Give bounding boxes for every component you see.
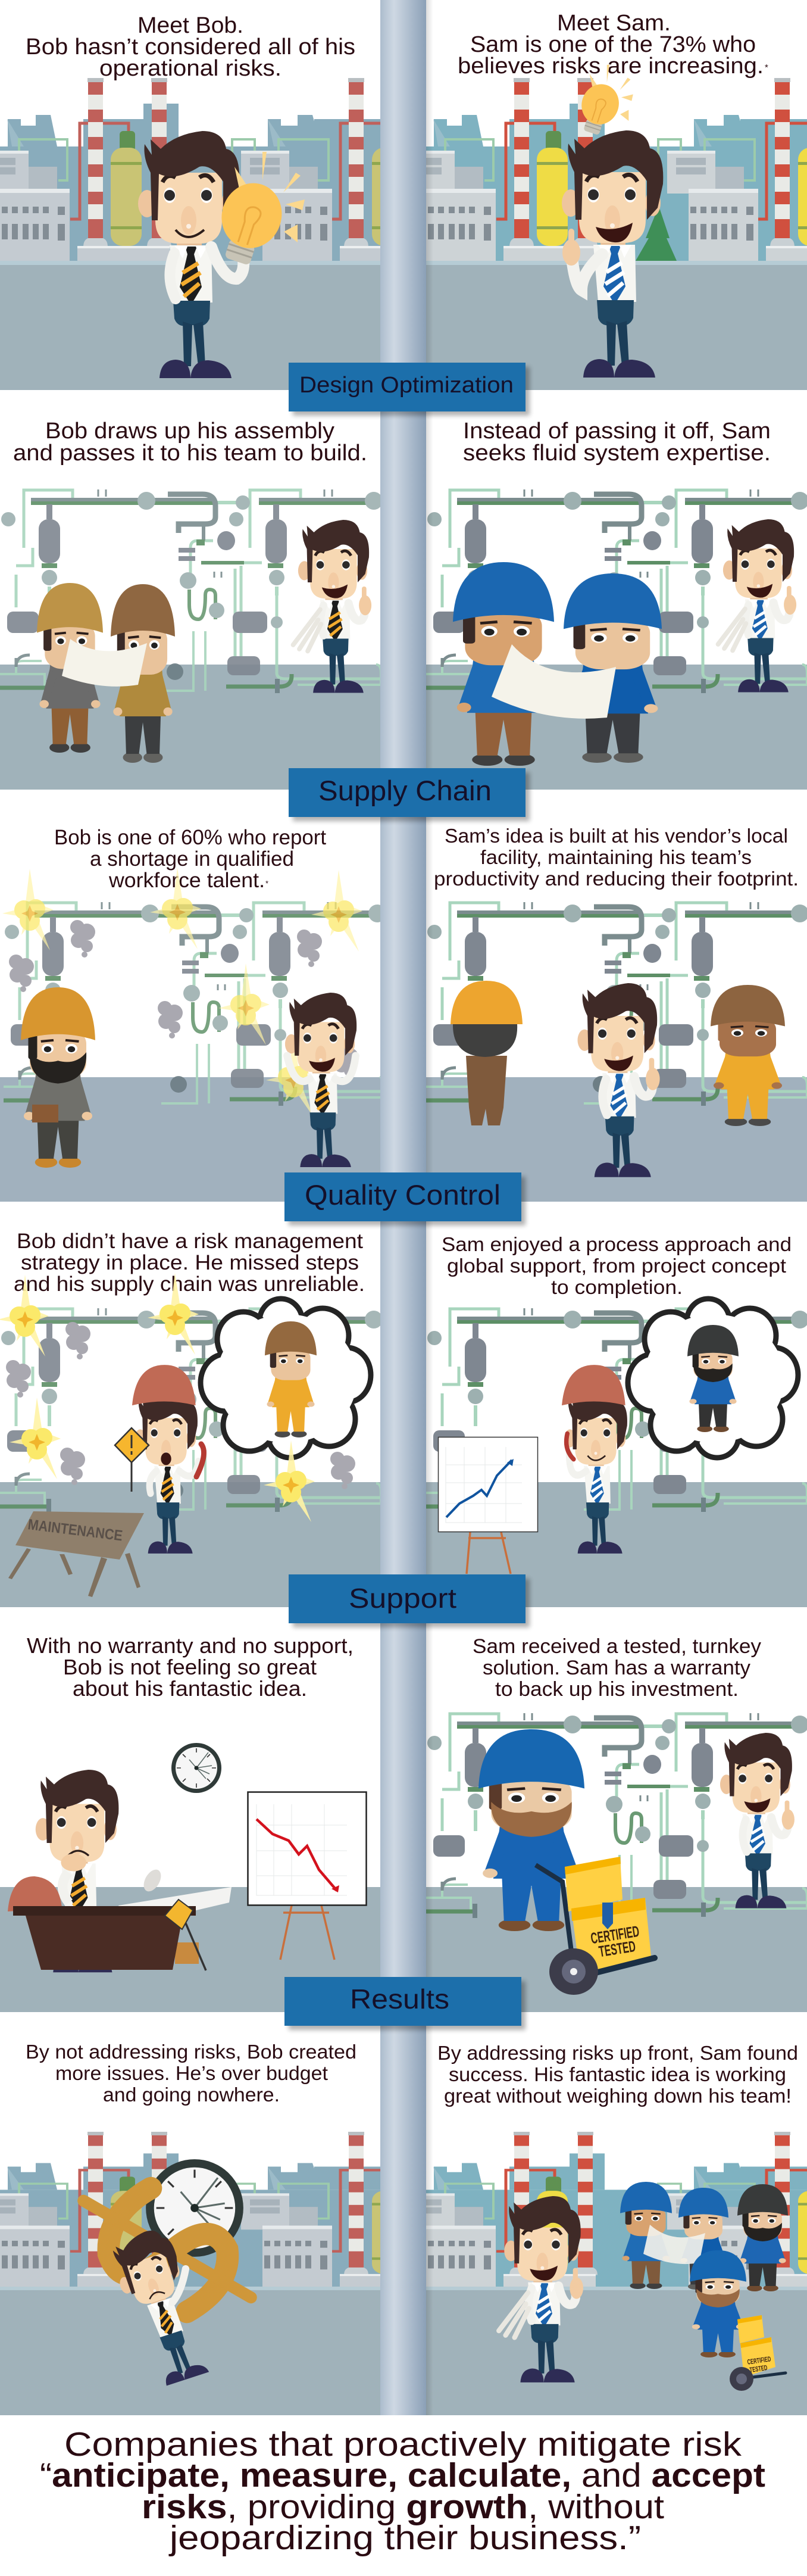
heading: Sam received a tested, turnkey <box>473 1635 761 1658</box>
heading <box>14 1230 365 1296</box>
worker: technician with trolley <box>690 2250 786 2391</box>
character: Bob panicking <box>285 993 356 1167</box>
section label: Results: Results <box>350 1984 449 2014</box>
closing statement <box>40 2425 765 2557</box>
worker: bearded with clipboard <box>21 987 95 1168</box>
heading: seeks fluid system expertise. <box>463 441 771 466</box>
worker: blue hard hat left <box>453 562 554 766</box>
character: Sam thumbs up <box>577 983 660 1177</box>
heading: By not addressing risks, Bob created <box>26 2041 356 2063</box>
icon: warning sign <box>115 1428 149 1492</box>
heading: great without weighing down his team! <box>444 2085 792 2107</box>
thought cloud: unreliable worker <box>201 1299 371 1458</box>
heading <box>442 1233 792 1298</box>
heading: more issues. He’s over budget <box>55 2062 328 2084</box>
heading <box>437 2042 798 2107</box>
heading <box>54 826 326 892</box>
section label: Supply Chain <box>289 768 530 821</box>
section label: Design Optimization: Design Optimization <box>299 373 514 398</box>
pipework <box>426 1713 807 1918</box>
worker: seen from behind <box>451 981 523 1125</box>
heading: With no warranty and no support, <box>27 1633 354 1658</box>
panel: scene 2 Bob <box>0 419 383 763</box>
worker: orange overalls <box>711 985 785 1126</box>
pipework <box>426 489 807 694</box>
panel: scene 2 Sam <box>426 419 807 766</box>
heading: By addressing risks up front, Sam found <box>437 2042 798 2064</box>
panel: scene 3 Sam <box>426 825 807 1177</box>
heading: a shortage in qualified <box>90 847 294 871</box>
heading: workforce talent. <box>108 869 265 892</box>
heading: Meet Bob: Bob hasn’t considered all of his <box>26 35 355 60</box>
worker: technician with trolley: CERTIFIED <box>747 2354 771 2366</box>
section label: Support: Support <box>349 1583 456 1614</box>
blueprint <box>62 639 147 687</box>
heading: Meet Bob: operational risks. <box>99 56 281 81</box>
box label: TESTED <box>598 1937 637 1960</box>
heading: Bob is not feeling so great <box>63 1655 317 1679</box>
pipework <box>426 902 807 1107</box>
heading: Meet Sam: Sam is one of the 73% who <box>470 32 756 57</box>
heading <box>13 419 367 466</box>
chart: rising line on easel <box>438 1437 538 1574</box>
character: worried Bob in hard hat <box>132 1365 199 1554</box>
icon: large clock <box>146 2159 243 2257</box>
smoke puffs <box>9 920 358 1082</box>
icon: wall clock <box>171 1743 221 1793</box>
heading <box>473 1635 761 1701</box>
factory background <box>426 2132 807 2290</box>
heading: about his fantastic idea. <box>73 1676 307 1701</box>
heading: facility, maintaining his team’s <box>480 846 752 868</box>
heading: and going nowhere. <box>103 2084 280 2106</box>
section label: Quality Control <box>284 1172 526 1225</box>
heading: productivity and reducing their footprint. <box>434 868 799 890</box>
icon: idea bulb <box>574 65 633 139</box>
panel: scene 4 Bob <box>0 1230 383 1597</box>
heading: * <box>265 879 268 888</box>
factory background <box>426 78 807 265</box>
trolley with certified boxes <box>536 1857 655 1995</box>
closing statement: risks, providing growth , without <box>142 2488 664 2526</box>
heading: success. His fantastic idea is working <box>449 2063 786 2085</box>
pipework <box>0 489 383 694</box>
maintenance sign <box>8 1511 144 1597</box>
explosions <box>0 1273 315 1522</box>
panel: scene 5 Sam <box>426 1635 807 1995</box>
closing statement: Companies that proactively mitigate risk <box>64 2425 742 2463</box>
closing statement: jeopardizing their business.” <box>168 2519 641 2557</box>
heading <box>463 419 771 466</box>
trees <box>636 206 677 261</box>
pipework <box>426 1308 807 1513</box>
heading: to completion. <box>551 1276 683 1298</box>
character: Bob with bulb <box>138 131 243 378</box>
icon: large light bulb <box>208 152 305 271</box>
heading: strategy in place. He missed steps <box>21 1251 359 1274</box>
divider column <box>380 0 433 2415</box>
heading: Bob is one of 60% who report <box>54 826 326 849</box>
panel: scene 1 Bob <box>0 13 403 378</box>
pipework <box>4 902 386 1107</box>
heading: and passes it to his team to build. <box>13 441 367 466</box>
chart: falling line on easel <box>248 1792 367 1960</box>
worker: blue hard hat right <box>564 573 662 763</box>
heading: global support, from project concept <box>447 1255 786 1277</box>
panel: scene 6 Sam <box>426 2042 807 2391</box>
heading: and his supply chain was unreliable. <box>14 1273 365 1296</box>
heading: Meet Bob <box>26 13 355 81</box>
clipboard <box>32 1105 58 1122</box>
panel: scene 3 Bob <box>2 826 386 1168</box>
heading: Sam’s idea is built at his vendor’s local <box>445 825 788 847</box>
worker group with blueprint <box>620 2182 788 2291</box>
heading: Meet Sam: * <box>765 63 768 73</box>
icon: giant dollar sign <box>61 2162 273 2336</box>
smoke puffs <box>6 1322 355 1489</box>
character: Bob thumbs up <box>293 520 371 693</box>
heading: Meet Bob: Meet Bob. <box>137 13 243 38</box>
heading: Meet Sam: Meet Sam. <box>557 11 671 36</box>
heading <box>27 1633 354 1701</box>
heading <box>434 825 799 890</box>
heading: Meet Sam <box>458 11 768 79</box>
heading: to back up his investment. <box>495 1678 739 1701</box>
heading: Sam enjoyed a process approach and <box>442 1233 792 1255</box>
factory background <box>0 78 403 265</box>
panel: scene 6 Bob <box>0 2041 403 2390</box>
section label: Supply Chain: Supply Chain <box>318 775 492 806</box>
panel: scene 5 Bob <box>8 1633 367 1972</box>
explosions <box>2 868 362 1117</box>
icon: red telephone <box>196 1444 204 1477</box>
worker: bearded technician in blue <box>478 1729 584 1931</box>
box label: CERTIFIED <box>589 1922 640 1947</box>
heading <box>26 2041 356 2106</box>
maintenance sign: MAINTENANCE <box>27 1516 123 1544</box>
character: sad Bob at desk <box>36 1770 118 1972</box>
thought cloud: supportive expert <box>628 1299 798 1458</box>
character: Bob carrying burden <box>107 2223 218 2390</box>
heading: Bob didn’t have a risk management <box>17 1230 363 1253</box>
character: Sam thumbs up <box>499 2196 583 2382</box>
heading: Instead of passing it off, Sam <box>463 419 771 444</box>
section label: Results <box>284 1977 526 2030</box>
closing statement: “anticipate, measure, calculate, and accept <box>40 2456 765 2494</box>
worker: brown hard hat <box>111 584 175 763</box>
box label <box>589 1922 643 1961</box>
heading: solution. Sam has a warranty <box>483 1657 750 1679</box>
section label: Support <box>289 1574 530 1627</box>
pipework <box>0 1308 383 1513</box>
worker: tan hard hat <box>37 583 103 753</box>
section label: Quality Control: Quality Control <box>305 1179 501 1211</box>
heading: Bob draws up his assembly <box>45 419 334 444</box>
desk with helmet and papers <box>8 1867 232 1970</box>
character: Sam pointing up <box>562 130 663 378</box>
section label: Design Optimization <box>289 363 530 416</box>
panel: scene 1 Sam <box>426 11 807 378</box>
character: Sam thumbs up <box>718 519 796 692</box>
blueprint <box>492 644 616 719</box>
worker: technician with trolley: TESTED <box>749 2363 768 2374</box>
character: Sam thumbs up <box>720 1733 795 1908</box>
factory background <box>0 2132 403 2290</box>
character: Sam in hard hat on phone <box>562 1365 627 1554</box>
heading: Meet Sam: believes risks are increasing. <box>458 54 764 79</box>
panel: scene 4 Sam <box>426 1233 807 1574</box>
